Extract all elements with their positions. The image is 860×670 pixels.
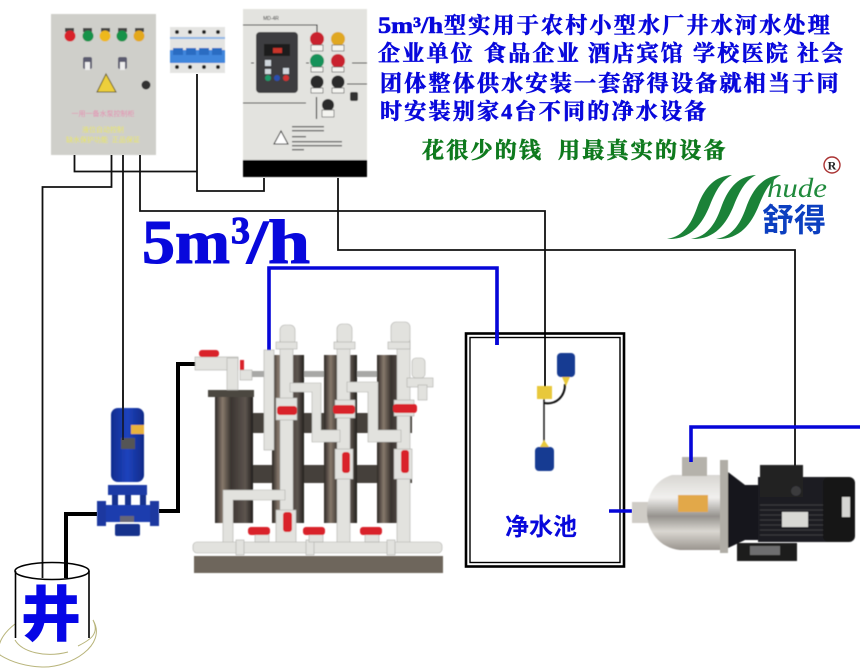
- line 1: 型实用于农村小型水厂井水河水处理: [444, 13, 832, 38]
- tank label: 净水池: [505, 514, 577, 541]
- panel label yellow: 液位自动控制: [82, 125, 124, 134]
- flow rate heading: 3: [231, 210, 250, 252]
- logo Chinese name: 舒得: [762, 202, 826, 238]
- flow rate heading: 5m: [142, 209, 230, 277]
- internal wiring: [243, 25, 367, 119]
- well label: 井: [21, 582, 81, 649]
- inlet elbow: [195, 357, 252, 390]
- filter column 2: [324, 355, 357, 523]
- multi-media filter assembly: [193, 322, 443, 573]
- filter column 1: [272, 355, 304, 523]
- line 1: 5m³/h: [378, 13, 443, 38]
- line 3: 团体整体供水安装一套舒得设备就相当于同: [380, 71, 841, 96]
- registered mark: R: [828, 158, 837, 172]
- logo wordmark: hude: [767, 173, 827, 203]
- flow rate heading: /h: [246, 209, 310, 277]
- panel: clean water tank: [466, 334, 624, 566]
- base frame: [194, 556, 443, 573]
- filter column 3: [377, 355, 410, 523]
- yellow nameplate: [678, 495, 708, 512]
- frequency inverter: [256, 32, 298, 93]
- pre-filter tank: [208, 390, 254, 523]
- flange: [720, 460, 728, 553]
- black cone: [728, 472, 760, 548]
- white connecting pipes: [223, 382, 414, 544]
- panel: variable frequency cabinet: [243, 9, 367, 177]
- float level switch: [535, 353, 575, 471]
- dark cross bars: [247, 413, 412, 483]
- terminal box: [760, 465, 803, 497]
- motor plate: [782, 512, 808, 527]
- foot: [737, 543, 797, 561]
- motor body: [758, 477, 830, 542]
- end cap: [823, 477, 855, 542]
- slogan: 花很少的钱: [422, 138, 543, 163]
- cabinet buttons: [310, 32, 358, 117]
- cabinet model label: MD-4R: [263, 16, 279, 22]
- inlet stub into tank (covers frame): [495, 330, 499, 345]
- outlet neck: [682, 457, 707, 476]
- pump inlet: [632, 502, 649, 523]
- bottom header pipe: [193, 530, 442, 555]
- line 2: 学校医院: [693, 41, 790, 66]
- slogan: [422, 138, 728, 163]
- well ground ring: [0, 620, 96, 667]
- panel label yellow: [66, 125, 140, 144]
- motor fins: [760, 505, 828, 535]
- blue pipe: pump outlet: [691, 427, 860, 462]
- indicator lamps: [64, 28, 144, 42]
- line 2: 社会: [797, 41, 846, 66]
- white vertical pipes: [264, 322, 433, 543]
- knob: [142, 80, 150, 90]
- red valves: [199, 350, 417, 535]
- control wiring: [42, 74, 795, 578]
- heading: product description: [378, 13, 846, 124]
- circuit breaker: [170, 27, 225, 73]
- well cylinder: [16, 571, 89, 638]
- stainless steel body: [647, 475, 728, 550]
- registered mark: [824, 157, 840, 173]
- line 2: 企业单位: [378, 41, 475, 66]
- line 4: 时安装别家4台不同的净水设备: [380, 99, 709, 124]
- flow rate heading: [142, 209, 310, 277]
- grey top pipe: [247, 371, 377, 377]
- panel label yellow: 缺水保护功能 正品保证: [66, 135, 140, 144]
- warning symbol and notes: [274, 126, 342, 150]
- panel: control box: [51, 14, 156, 155]
- horizontal booster pump: [632, 457, 855, 561]
- logo: Shude: [667, 157, 840, 239]
- blue pipe: filter to clean water tank: [269, 268, 497, 352]
- slogan: 用最真实的设备: [558, 138, 728, 163]
- blue pipe: tank to booster pump: [609, 509, 632, 513]
- logo waves: [667, 175, 781, 239]
- black wire into pump: [122, 390, 124, 440]
- line 2: 食品企业: [484, 41, 581, 66]
- selector switches: [83, 57, 127, 70]
- well: [0, 562, 96, 667]
- warning sign: [97, 74, 116, 92]
- line 2: 酒店宾馆: [588, 41, 685, 66]
- black pipe: well to pump: [66, 514, 97, 578]
- vertical inline pump: [97, 408, 159, 536]
- panel label pink: 一用一备水泵控制柜: [72, 109, 134, 118]
- black pipe: pump to filter: [159, 364, 196, 511]
